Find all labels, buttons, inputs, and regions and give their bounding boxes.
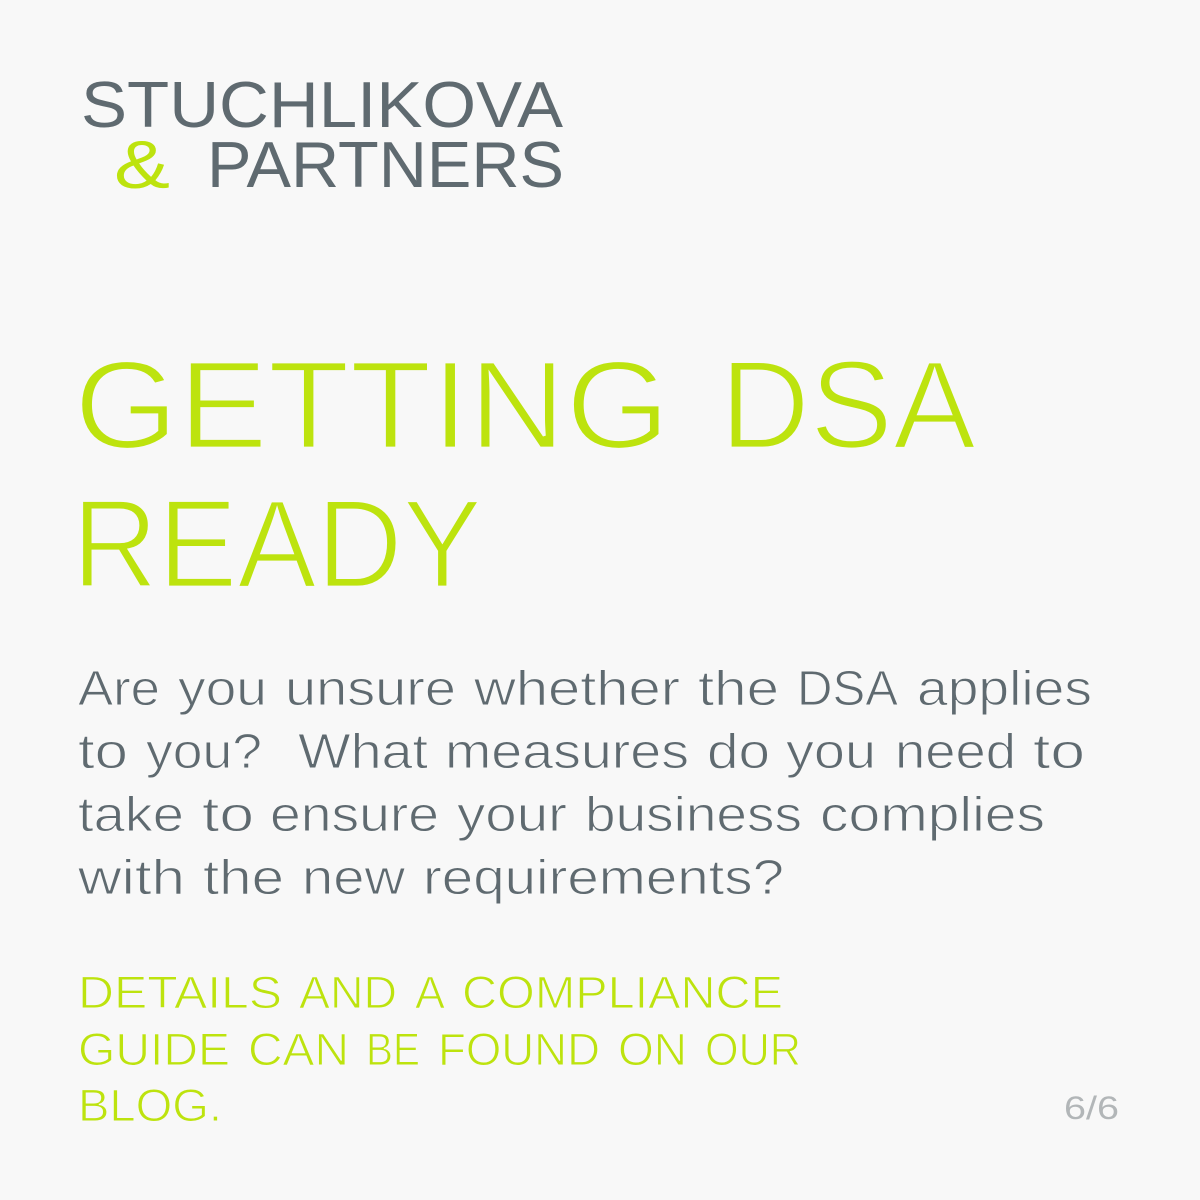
call to action: GUIDE [78,1024,230,1075]
body text: to [202,788,254,842]
logo ampersand: & [114,127,170,203]
call to action: A [415,967,445,1018]
title: GETTING [74,336,670,475]
page number: 6/6 [1064,1090,1119,1126]
body text: your [457,788,567,842]
call to action: BE [366,1024,420,1075]
body text: What [298,725,428,779]
body text: measures [445,725,689,779]
body text: the [698,662,779,716]
call to action: DETAILS [78,967,282,1018]
body text: applies [917,662,1092,716]
body text: to [78,725,128,779]
logo text: Partners: PARTNERS [207,128,564,201]
body text: unsure [285,662,456,716]
body text: new [302,851,406,905]
body text: you? [146,725,262,779]
body text: the [203,851,284,905]
body text: you [786,725,876,779]
body text: with [77,851,185,905]
body text: take [78,788,184,842]
body text: you [178,662,267,716]
call to action: COMPLIANCE [462,967,783,1018]
body text: Are [78,662,160,716]
call to action: FOUND [438,1024,600,1075]
call to action: AND [299,967,397,1018]
title: DSA [720,336,977,475]
body text: business [585,788,802,842]
body text: DSA [797,662,898,716]
body text: ensure [270,788,439,842]
body text: requirements? [423,851,784,905]
call to action [78,967,801,1131]
body text: to [1033,725,1085,779]
call to action: BLOG. [78,1080,222,1131]
body text [77,662,1092,905]
logo [81,68,564,203]
logo text: Stuchlikova: STUCHLIKOVA [81,68,564,141]
title: READY [72,475,482,614]
body text: whether [473,662,680,716]
body text: do [707,725,770,779]
title [72,336,977,614]
call to action: OUR [705,1024,801,1075]
body text: need [895,725,1016,779]
body text: complies [820,788,1045,842]
call to action: CAN [248,1024,349,1075]
call to action: ON [618,1024,687,1075]
